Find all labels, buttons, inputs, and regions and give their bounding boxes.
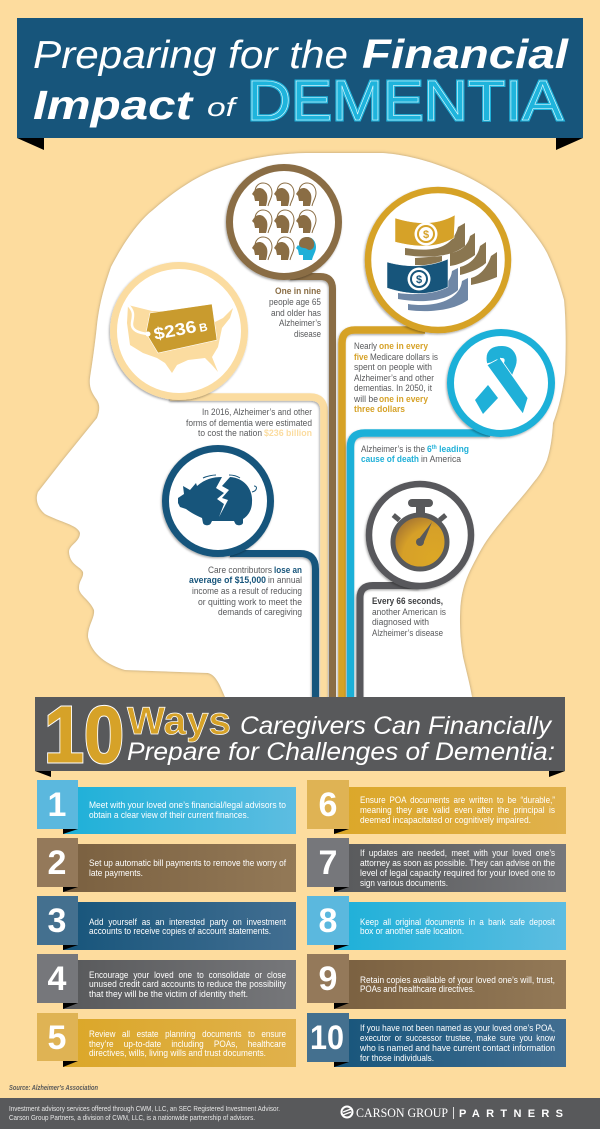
title banner: of <box>207 92 239 122</box>
text: one in nine: disease <box>294 329 321 340</box>
step 1: 1 <box>48 786 66 824</box>
step 1: obtain a clear view of their current finances. <box>89 809 249 820</box>
step 2: 2 <box>48 844 66 882</box>
ten ways banner: 10 <box>44 690 124 779</box>
text: cost <box>186 407 313 439</box>
step 7: 7 <box>319 844 337 882</box>
step 10: 10 <box>310 1019 344 1057</box>
text: cost: to cost the nation <box>198 428 262 439</box>
step 7: level of legal capacity required for your loved one to <box>360 867 555 878</box>
step 10: for those individuals. <box>360 1052 434 1063</box>
icon: broken piggy bank <box>166 448 270 554</box>
step 3 <box>37 896 296 950</box>
step 9: Retain copies available of your loved one’s will, trust, <box>360 974 555 985</box>
text: income loss: demands of caregiving <box>218 607 302 618</box>
icon: stopwatch <box>369 484 471 586</box>
step 8: Keep all original documents in a bank safe deposit <box>360 916 555 927</box>
ten ways banner: Ways <box>127 700 231 743</box>
icon: money <box>368 190 508 330</box>
step 3: Add yourself as an interested party on investment <box>89 916 286 927</box>
text: income loss: Care contributors <box>208 565 272 576</box>
connector: gray <box>360 586 420 700</box>
text: medicare: three dollars <box>354 404 405 415</box>
step 2: Set up automatic bill payments to remove the worry of <box>89 857 286 868</box>
text: every 66 seconds: another American is <box>372 607 446 618</box>
icon: map with price tag: $236 <box>152 317 198 344</box>
step 5: 5 <box>48 1019 66 1057</box>
step 7: attorney as soon as possible. They can advise on the <box>360 857 555 868</box>
text: one in nine: people age 65 <box>269 297 321 308</box>
title banner: DEMENTIA <box>247 69 563 133</box>
connector: brown <box>290 276 332 700</box>
step 10: If you have not been named as your loved one’s POA, <box>360 1022 555 1033</box>
panel: one in nine <box>230 168 338 700</box>
title banner <box>17 18 583 150</box>
text: cost: $236 billion <box>264 428 312 439</box>
step 1 <box>37 780 296 834</box>
text: one in nine: One in nine <box>275 286 321 297</box>
text: leading cause <box>361 444 469 465</box>
disclosure text: Carson Group Partners, a division of CWM, LLC, is a nationwide partnership of advisors. <box>9 1115 255 1122</box>
text: income loss: income as a result of reducing <box>192 586 302 597</box>
step 7: sign various documents. <box>360 877 448 888</box>
step 4: 4 <box>48 960 67 998</box>
text: medicare: dementias. In 2050, it <box>354 383 432 394</box>
step 8 <box>307 896 566 950</box>
disclosure text <box>9 1106 280 1122</box>
connector: cyan <box>350 433 490 700</box>
panel: every 66 seconds <box>360 484 471 700</box>
step 6: Ensure POA documents are written to be “durable,” <box>360 794 555 805</box>
step 5: they’re up-to-date including POAs, healthcare <box>89 1038 286 1049</box>
icon: money: $ <box>423 229 429 241</box>
ten ways banner: Prepare for Challenges of Dementia: <box>127 738 555 766</box>
logo: Carson Group Partners <box>342 1106 563 1120</box>
text: medicare: one in every <box>379 394 429 405</box>
title banner: Impact <box>33 82 195 128</box>
text: leading cause: Alzheimer’s is the <box>361 444 425 455</box>
step 6: 6 <box>319 786 337 824</box>
text: leading cause: 6 <box>427 444 432 455</box>
text: medicare: one in every <box>379 341 429 352</box>
text: medicare: five <box>354 352 368 363</box>
text: income loss: average of $15,000 <box>189 575 266 586</box>
logo: Carson Group Partners: CARSON GROUP <box>356 1106 448 1120</box>
text: one in nine: Alzheimer’s <box>279 318 321 329</box>
head silhouette <box>37 153 566 697</box>
text: medicare: spent on people with <box>354 362 432 373</box>
step 5 <box>37 1013 296 1067</box>
step 2 <box>37 838 296 892</box>
text: medicare: Alzheimer’s and other <box>354 373 435 384</box>
text: leading cause: in America <box>421 454 462 465</box>
step 9: 9 <box>319 960 337 998</box>
connector: dark blue <box>230 554 316 700</box>
connector: tan <box>170 397 324 700</box>
text: income loss: in annual <box>268 575 302 586</box>
step 1: Meet with your loved one’s financial/legal advisors to <box>89 799 286 810</box>
text: cost: In 2016, Alzheimer’s and other <box>202 407 313 418</box>
step 9: POAs and healthcare directives. <box>360 983 475 994</box>
step 4 <box>37 954 296 1009</box>
step 6 <box>307 780 566 834</box>
step 8: 8 <box>319 902 337 940</box>
step 9 <box>307 954 566 1009</box>
text: leading cause: th <box>432 445 437 451</box>
panel: cost of dementia <box>114 266 324 700</box>
text: cost: forms of dementia were estimated <box>186 418 312 429</box>
text: every 66 seconds: diagnosed with <box>372 617 429 628</box>
icon: map with price tag <box>114 266 244 396</box>
connector: gold <box>342 330 425 700</box>
step 4: Encourage your loved one to consolidate or close <box>89 969 286 980</box>
title banner: Preparing for the <box>33 34 348 77</box>
text: income loss <box>189 565 302 618</box>
logo: Carson Group Partners: PARTNERS <box>459 1108 563 1120</box>
step 7 <box>307 838 566 892</box>
icon: awareness ribbon <box>450 332 552 434</box>
text: income loss: lose an <box>274 565 302 576</box>
text: medicare <box>353 341 438 415</box>
step 6: meaning they are valid even after the principal is <box>360 804 555 815</box>
panel: income loss <box>166 448 316 700</box>
step 6: deemed incapacitated or cognitively impaired. <box>360 814 531 825</box>
text: leading cause: leading <box>437 444 469 455</box>
step 5: Review all estate planning documents to ensure <box>89 1028 286 1039</box>
text: leading cause: cause of death <box>361 454 419 465</box>
title banner: Financial <box>362 31 570 77</box>
footer bar <box>0 1098 600 1129</box>
title banner: DEMENTIA <box>247 69 563 133</box>
text: every 66 seconds: Alzheimer’s disease <box>372 628 443 639</box>
step 7: If updates are needed, meet with your loved one’s <box>360 847 555 858</box>
step 5: directives, wills, living wills and trust documents. <box>89 1047 266 1058</box>
text: medicare: will be <box>353 394 378 405</box>
step 3: 3 <box>48 902 66 940</box>
step 4: unused credit card accounts to reduce the possibility <box>89 978 286 989</box>
ten ways banner: 10 <box>44 690 124 779</box>
step 10: executor or successor trustee, make sure you know <box>360 1032 555 1043</box>
text: one in nine: and older has <box>271 308 321 319</box>
step 3: accounts to receive copies of account statements. <box>89 925 271 936</box>
text: medicare: Nearly <box>354 341 377 352</box>
icon: nine heads <box>230 168 338 276</box>
disclosure text: Investment advisory services offered through CWM, LLC, an SEC Registered Investment Advisor. <box>9 1106 280 1113</box>
text: medicare: Medicare dollars is <box>370 352 438 363</box>
panel: sixth leading cause <box>350 332 552 700</box>
text: every 66 seconds <box>372 596 446 639</box>
text: one in nine <box>269 286 321 340</box>
text: income loss: or quitting work to meet the <box>198 597 302 608</box>
source note: Source: Alzheimer’s Association <box>9 1083 98 1092</box>
icon: map with price tag: B <box>198 322 209 335</box>
ten ways banner <box>35 690 565 779</box>
text: every 66 seconds: Every 66 seconds, <box>372 596 443 607</box>
step 10 <box>307 1013 566 1067</box>
step 4: that they will be the victim of identity theft. <box>89 988 248 999</box>
ten ways banner: Caregivers Can Financially <box>240 712 553 740</box>
icon: money: $ <box>416 274 422 286</box>
panel: medicare dollars <box>342 190 508 700</box>
step 8: box or another safe location. <box>360 925 464 936</box>
step 2: late payments. <box>89 867 143 878</box>
step 10: who is named and have current contact information <box>359 1042 555 1053</box>
